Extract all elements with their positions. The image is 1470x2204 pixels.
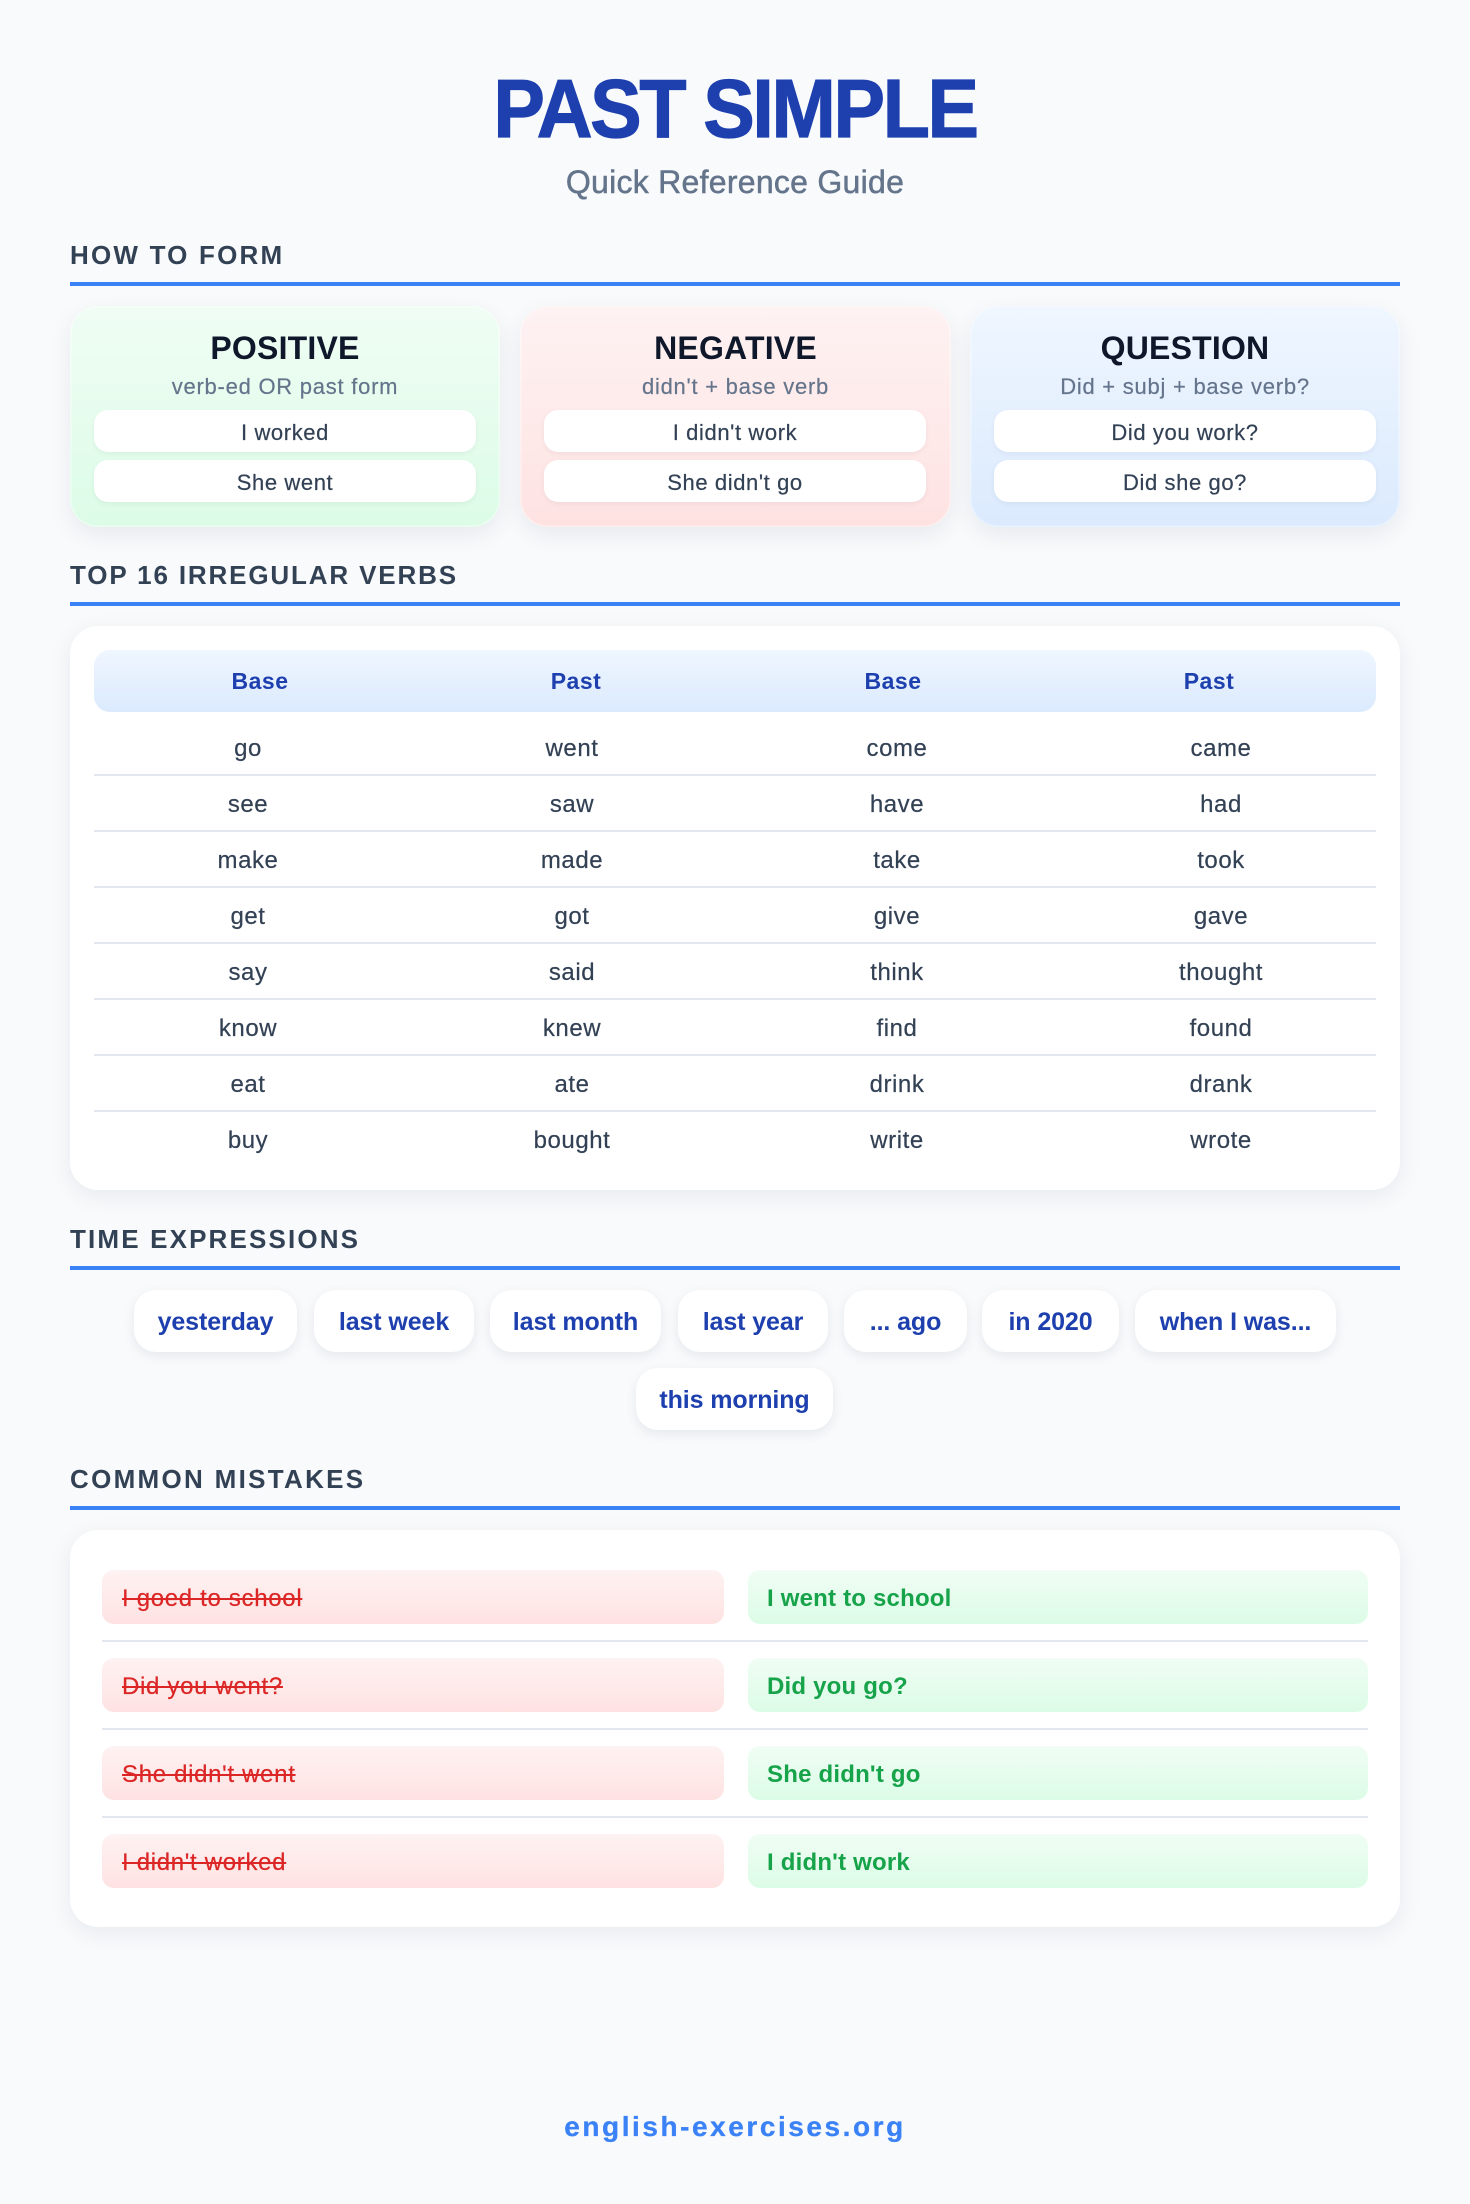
incorrect sentence: I didn't worked: [122, 1849, 286, 1876]
table row: buy: write: [870, 1126, 924, 1154]
incorrect sentence: She didn't went: [122, 1761, 296, 1788]
table row: eat: drink: [870, 1070, 924, 1098]
question formula: Did + subj + base verb?: [1060, 374, 1310, 399]
table header: [94, 650, 1376, 712]
correct sentence: [748, 1746, 1368, 1800]
table row: say: [94, 944, 1376, 1000]
table row: get: got: [554, 902, 590, 930]
section heading: how to form: [70, 240, 1400, 286]
chip: last month: last month: [513, 1308, 638, 1336]
chip: when I was: [1135, 1290, 1336, 1352]
question example 2: Did she go?: [1123, 470, 1247, 495]
incorrect sentence: [102, 1570, 724, 1624]
chip: when I was: when I was...: [1160, 1308, 1311, 1336]
table row: say: said: [549, 958, 595, 986]
negative formula: didn't + base verb: [642, 374, 829, 399]
chip: last week: last week: [339, 1308, 449, 1336]
table row: buy: bought: [534, 1126, 610, 1154]
panel: positive card: [70, 306, 500, 527]
table row: get: get: [230, 902, 266, 930]
correct sentence: I didn't work: [767, 1849, 910, 1876]
table row: see: have: [870, 790, 924, 818]
question example 1: Did you work?: [1111, 420, 1259, 445]
table row: see: had: [1200, 790, 1242, 818]
chip: ago: ... ago: [870, 1308, 941, 1336]
table header: Base: [865, 668, 921, 694]
table row: make: take: [873, 846, 921, 874]
mistake row 1: [102, 1570, 1368, 1642]
chip: ago: [844, 1290, 967, 1352]
table row: eat: ate: [554, 1070, 590, 1098]
table row: see: [94, 776, 1376, 832]
mistake row 3: [102, 1746, 1368, 1818]
correct sentence: [748, 1834, 1368, 1888]
positive example 2: She went: [237, 470, 333, 495]
footer: website: english-exercises.org: [564, 2111, 906, 2142]
positive example 1: I worked: [241, 420, 329, 445]
incorrect sentence: [102, 1834, 724, 1888]
section heading: common mistakes: [70, 1464, 1400, 1510]
table row: get: gave: [1194, 902, 1248, 930]
negative example 1: [544, 410, 926, 452]
table header: Past: [551, 668, 601, 694]
table row: eat: [94, 1056, 1376, 1112]
panel: question card: [970, 306, 1400, 527]
chip: last month: [490, 1290, 661, 1352]
correct sentence: [748, 1570, 1368, 1624]
table row: make: made: [541, 846, 603, 874]
table row: know: knew: [543, 1014, 601, 1042]
table row: buy: [228, 1126, 1252, 1154]
table row: go: came: [1191, 734, 1251, 762]
mistake row 2: [102, 1658, 1368, 1730]
chip: this morning: this morning: [659, 1386, 810, 1414]
table row: buy: buy: [228, 1126, 268, 1154]
table row: make: make: [218, 846, 278, 874]
chip: in 2020: [982, 1290, 1119, 1352]
panel: irregular verbs table: [70, 626, 1400, 1190]
negative example 2: [544, 460, 926, 502]
correct sentence: [748, 1658, 1368, 1712]
title: PAST SIMPLE: [493, 62, 977, 155]
time expression chips: [133, 1308, 1337, 1435]
chip: in 2020: in 2020: [1008, 1308, 1093, 1336]
positive example 2: [94, 460, 476, 502]
table row: make: took: [1197, 846, 1245, 874]
table row: say: thought: [1179, 958, 1263, 986]
positive example 1: [94, 410, 476, 452]
table row: go: went: [546, 734, 598, 762]
incorrect sentence: [102, 1658, 724, 1712]
chip: yesterday: [134, 1290, 297, 1352]
section heading: how to form: HOW TO FORM: [70, 240, 284, 270]
positive heading: POSITIVE: [210, 330, 360, 366]
mistake row 4: [102, 1834, 1368, 1888]
chip: yesterday: yesterday: [158, 1308, 273, 1336]
negative heading: NEGATIVE: [654, 330, 817, 366]
incorrect sentence: I goed to school: [122, 1585, 302, 1612]
table row: eat: eat: [230, 1070, 266, 1098]
section heading: common mistakes: COMMON MISTAKES: [70, 1464, 365, 1494]
table row: eat: drank: [1190, 1070, 1252, 1098]
table row: see: see: [228, 790, 268, 818]
table header: Base: [232, 668, 288, 694]
negative example 2: She didn't go: [667, 470, 803, 495]
question example 1: [994, 410, 1376, 452]
table row: see: saw: [550, 790, 594, 818]
section heading: time expressions: [70, 1224, 1400, 1270]
positive formula: verb-ed OR past form: [172, 374, 398, 399]
question example 2: [994, 460, 1376, 502]
table row: go: go: [234, 734, 262, 762]
table row: get: [94, 888, 1376, 944]
table header: Past: [1184, 668, 1234, 694]
table row: go: come: [867, 734, 927, 762]
panel: negative card: [520, 306, 951, 527]
correct sentence: She didn't go: [767, 1761, 921, 1788]
table row: know: found: [1190, 1014, 1252, 1042]
incorrect sentence: [102, 1746, 724, 1800]
header: title and subtitle: [493, 62, 977, 200]
chip: this morning: [636, 1368, 833, 1430]
table row: say: say: [228, 958, 268, 986]
table row: buy: wrote: [1190, 1126, 1252, 1154]
section heading: irregular verbs: [70, 560, 1400, 606]
correct sentence: Did you go?: [767, 1673, 908, 1700]
subtitle: Quick Reference Guide: [566, 164, 904, 200]
negative example 1: I didn't work: [673, 420, 797, 445]
chip: last year: [678, 1290, 828, 1352]
table row: go: [94, 720, 1376, 776]
table row: make: [94, 832, 1376, 888]
panel: common mistakes: [70, 1530, 1400, 1927]
table row: know: know: [219, 1014, 277, 1042]
chip: last week: [314, 1290, 474, 1352]
table row: know: [94, 1000, 1376, 1056]
table row: know: find: [877, 1014, 917, 1042]
incorrect sentence: Did you went?: [122, 1673, 283, 1700]
chip: last year: last year: [703, 1308, 803, 1336]
section heading: irregular verbs: TOP 16 IRREGULAR VERBS: [70, 560, 458, 590]
correct sentence: I went to school: [767, 1585, 952, 1612]
table row: get: give: [874, 902, 920, 930]
question heading: QUESTION: [1101, 330, 1269, 366]
section heading: time expressions: TIME EXPRESSIONS: [70, 1224, 360, 1254]
table row: say: think: [870, 958, 924, 986]
